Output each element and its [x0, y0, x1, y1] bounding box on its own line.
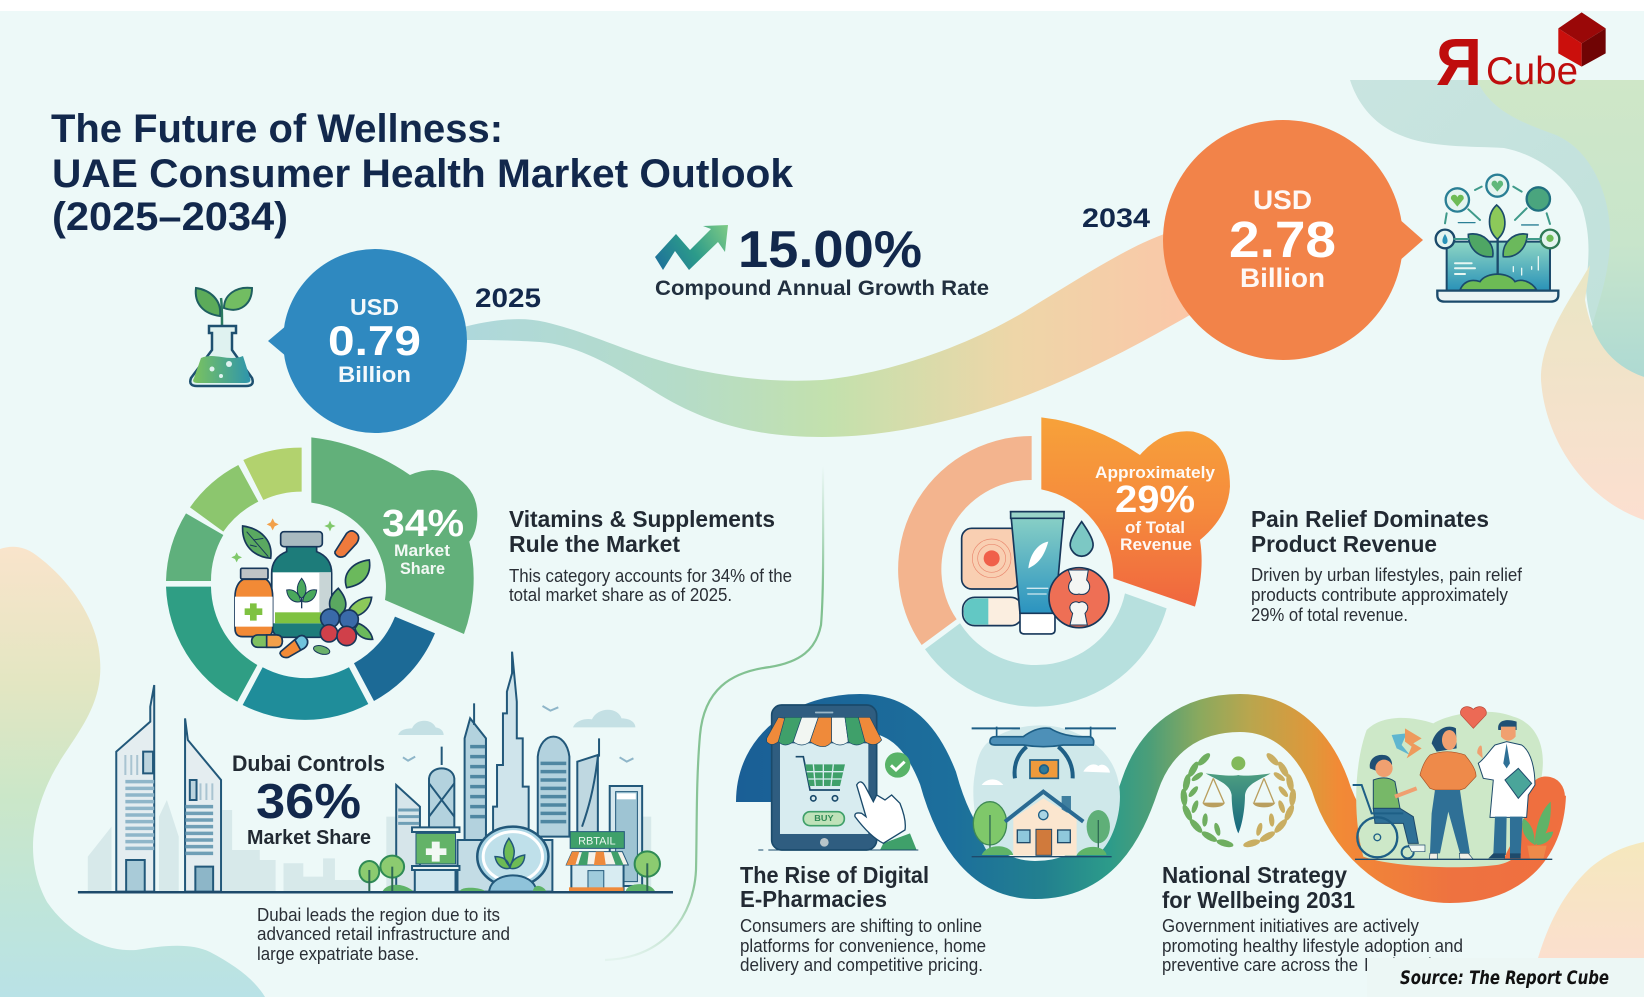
- text block: national strategy: promoting healthy lifestyle adoption and: [1162, 935, 1463, 956]
- text block: national strategy: National Strategy: [1162, 862, 1347, 888]
- text block: vitamins and supplements: total market share as of 2025.: [509, 584, 732, 605]
- text block: pain relief: Pain Relief Dominates: [1251, 506, 1489, 532]
- text block: pain relief: 29% of total revenue.: [1251, 604, 1408, 625]
- wheelchair person: [1370, 755, 1392, 772]
- callout: Dubai share: Market Share: [247, 826, 371, 849]
- background blob: bottom right: [1538, 842, 1644, 958]
- text block: Dubai: [257, 904, 510, 964]
- icon: flask with sprout: [190, 288, 253, 386]
- ground line: [78, 891, 673, 894]
- icon: growth arrow: [655, 225, 728, 270]
- potted plant: [1522, 802, 1553, 845]
- donut chart: vitamins and supplements: Market: [394, 541, 450, 560]
- wreath: [1180, 751, 1297, 849]
- logo: [1436, 12, 1606, 100]
- title: (2025–2034): [52, 195, 288, 239]
- icon: drone delivery to house: [972, 725, 1120, 857]
- growth ribbon: [460, 232, 1195, 437]
- downtown towers: [396, 785, 420, 892]
- icon: digital plant on laptop: [1436, 175, 1559, 302]
- illustration: Dubai skyline: RBTAIL: [578, 835, 616, 847]
- text block: pain relief: Driven by urban lifestyles, pain relief: [1251, 564, 1523, 585]
- 2025 bubble: Billion: [338, 362, 411, 387]
- source box: [1367, 958, 1644, 997]
- text block: e-pharmacies: platforms for convenience, home: [740, 935, 986, 956]
- highlighted slice: [1041, 417, 1230, 607]
- donut chart: vitamins and supplements: Share: [400, 559, 445, 578]
- text block: pain relief: [1251, 506, 1523, 625]
- 2034 bubble: 2.78: [1229, 211, 1336, 268]
- illustration: people and doctor: [1353, 707, 1564, 867]
- icon: e-pharmacy tablet: BUY: [814, 814, 834, 823]
- text block: e-pharmacies: [740, 862, 986, 975]
- text block: Dubai: Dubai leads the region due to its: [257, 904, 500, 925]
- donut chart: pain relief: Approximately: [1095, 463, 1216, 482]
- CAGR callout: Compound Annual Growth Rate: [655, 277, 989, 300]
- mall dome: [457, 840, 552, 892]
- icon: wellbeing emblem: [1180, 751, 1297, 849]
- thin divider curve: [605, 466, 823, 960]
- title: [51, 107, 794, 239]
- text block: national strategy: [1162, 862, 1463, 975]
- doctor: [1498, 720, 1517, 730]
- background blob: top right: [1350, 80, 1644, 377]
- text block: national strategy: preventive care across the: [1162, 954, 1358, 975]
- orange end cap of wave: [1531, 777, 1565, 817]
- donut chart: vitamins and supplements: [166, 437, 477, 720]
- CAGR callout: [655, 221, 989, 300]
- callout: Dubai share: 36%: [256, 775, 361, 829]
- logo: Я: [1436, 25, 1482, 100]
- label: 2025: 2025: [475, 283, 541, 313]
- callout: Dubai share: [232, 751, 385, 849]
- text block: e-pharmacies: E-Pharmacies: [740, 886, 887, 912]
- text block: vitamins and supplements: Vitamins & Supplements: [509, 506, 775, 532]
- icon: supplement bottles and berries: [235, 526, 373, 658]
- standing woman: [1432, 727, 1457, 752]
- 2034 bubble: [1163, 120, 1423, 360]
- text block: e-pharmacies: The Rise of Digital: [740, 862, 929, 888]
- donut chart: vitamins and supplements: 34%: [382, 503, 464, 545]
- CAGR callout: 15.00%: [738, 221, 922, 279]
- title: UAE Consumer Health Market Outlook: [52, 152, 794, 196]
- text block: Dubai: large expatriate base.: [257, 943, 419, 964]
- text block: Dubai: advanced retail infrastructure and: [257, 923, 510, 944]
- donut chart: pain relief: [898, 417, 1230, 707]
- highlighted slice: [311, 437, 477, 634]
- 2034 bubble: USD: [1253, 185, 1312, 215]
- icon: pain relief products: [962, 512, 1109, 634]
- icon: e-pharmacy tablet: [758, 705, 918, 850]
- twin towers left: [116, 685, 154, 892]
- 2025 bubble: 0.79: [328, 317, 421, 364]
- text block: vitamins and supplements: This category accounts for 34% of the: [509, 565, 792, 586]
- text block: pain relief: products contribute approximately: [1251, 584, 1509, 605]
- 2034 bubble: Billion: [1240, 263, 1325, 293]
- wave ribbon: [755, 713, 1547, 884]
- illustration: Dubai skyline: [78, 652, 673, 892]
- donut chart: pain relief: 29%: [1115, 479, 1195, 521]
- label: 2034: 2034: [1082, 203, 1150, 233]
- donut chart: pain relief: Revenue: [1120, 535, 1192, 554]
- faint background skyline: [88, 800, 651, 892]
- text block: vitamins and supplements: [509, 506, 792, 605]
- text block: national strategy: Government initiatives are actively: [1162, 915, 1420, 936]
- callout: Dubai share: Dubai Controls: [232, 751, 385, 776]
- text block: e-pharmacies: delivery and competitive pricing.: [740, 954, 983, 975]
- text block: national strategy: Federation.: [1364, 954, 1458, 975]
- background blob: right peach: [1541, 265, 1644, 520]
- title: The Future of Wellness:: [51, 107, 503, 151]
- logo: Cube: [1486, 50, 1578, 93]
- donut chart: pain relief: of Total: [1125, 518, 1185, 537]
- icon: cube: [1558, 12, 1606, 67]
- text block: national strategy: for Wellbeing 2031: [1162, 887, 1355, 913]
- retail store: [570, 832, 624, 848]
- clouds and birds: [398, 710, 635, 735]
- text block: vitamins and supplements: Rule the Market: [509, 531, 680, 557]
- text block: e-pharmacies: Consumers are shifting to online: [740, 915, 982, 936]
- text block: pain relief: Product Revenue: [1251, 531, 1437, 557]
- clinic: [412, 827, 459, 832]
- 2025 bubble: USD: [350, 294, 399, 320]
- 2025 bubble: [268, 249, 467, 433]
- background blob: left: [0, 547, 265, 997]
- trees and shrubs: [382, 884, 655, 892]
